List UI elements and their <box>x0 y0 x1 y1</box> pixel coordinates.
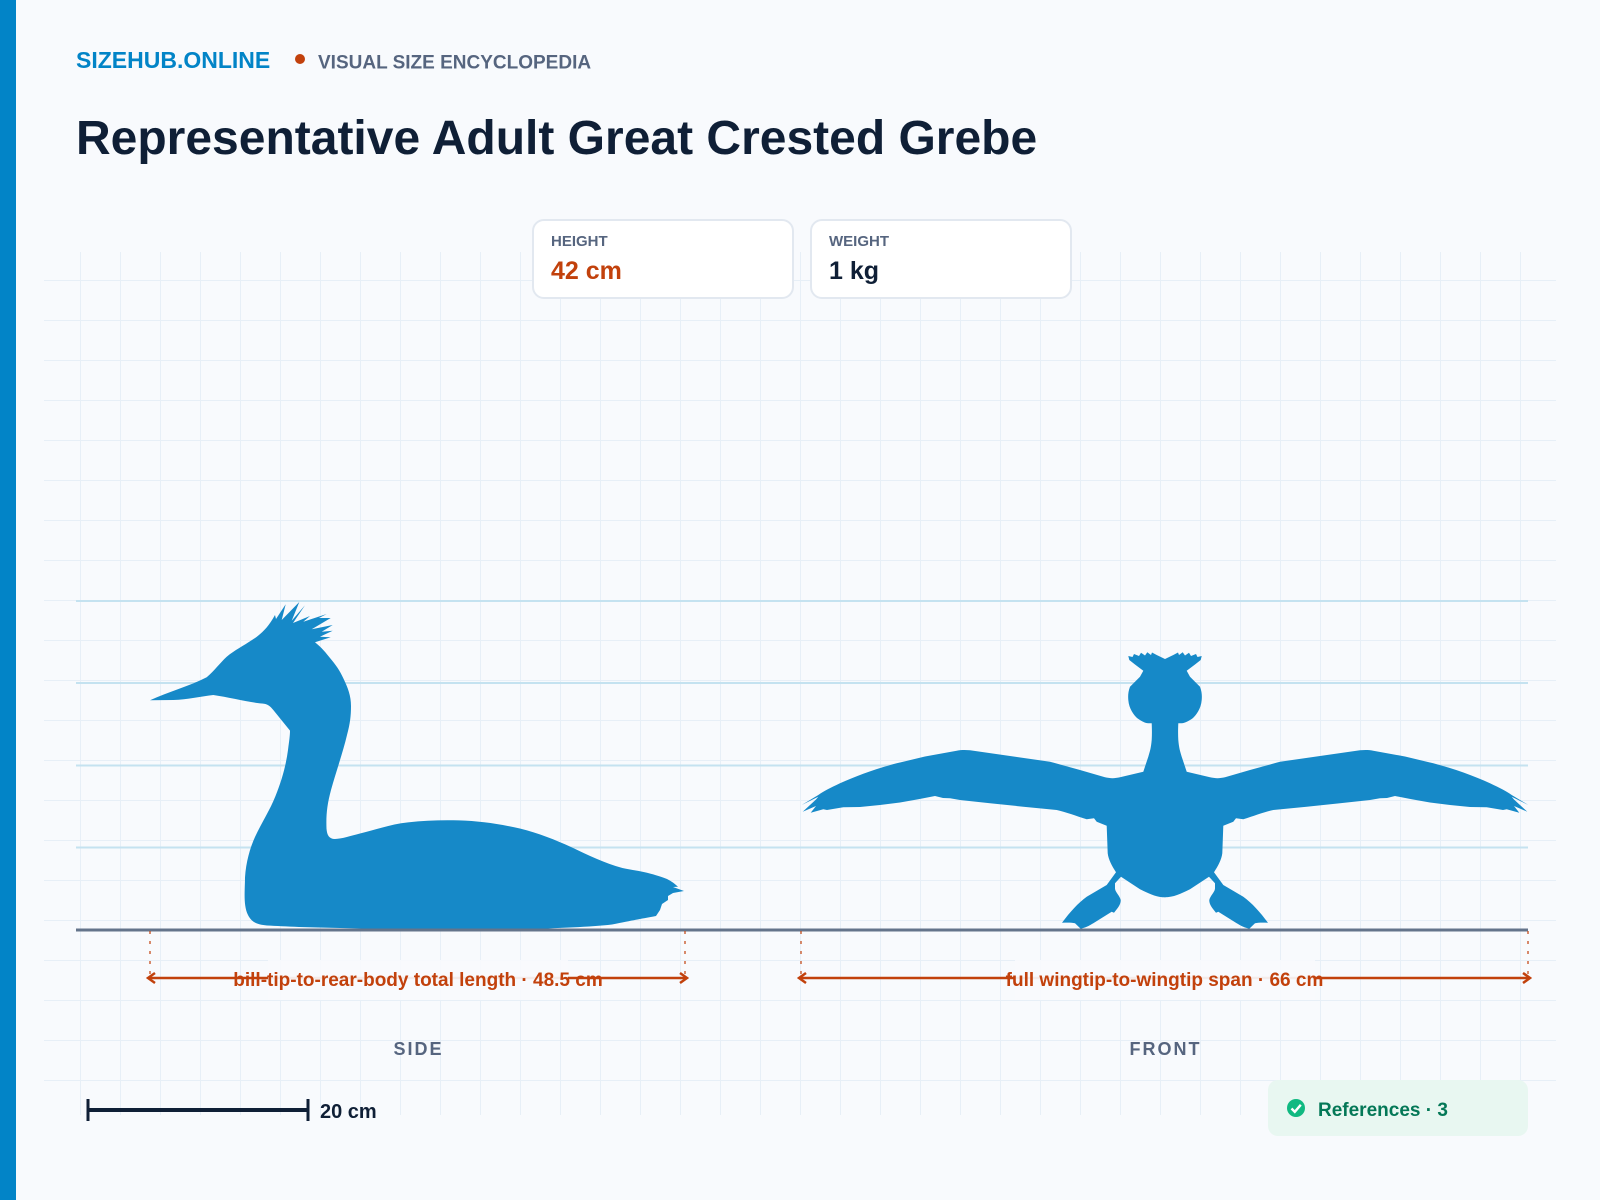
front view silhouette <box>802 652 1528 929</box>
height reference lines <box>76 601 1528 848</box>
side length dimension <box>148 931 687 1000</box>
front wingspan dimension: full wingtip-to-wingtip span · 66 cm <box>1006 970 1323 991</box>
stat card: weight: WEIGHT <box>829 233 889 250</box>
front view right half <box>1164 652 1528 929</box>
stat card: height: HEIGHT <box>551 233 608 250</box>
measurement grid <box>44 252 1556 1115</box>
stat card: weight <box>811 220 1071 298</box>
side view label: SIDE <box>393 1039 444 1059</box>
brand header: SIZEHUB.ONLINE <box>76 47 270 73</box>
references badge <box>1268 1080 1528 1136</box>
title: Representative Adult Great Crested Grebe <box>76 112 1037 165</box>
left accent bar <box>0 0 16 1200</box>
side length dimension: bill-tip-to-rear-body total length · 48.5 cm <box>233 970 603 991</box>
icon: check circle <box>1287 1099 1305 1117</box>
brand header <box>76 47 591 74</box>
front view label: FRONT <box>1130 1039 1202 1059</box>
references badge: References · 3 <box>1318 1100 1448 1121</box>
front wingspan dimension <box>799 931 1530 1000</box>
scale bar: 20 cm <box>320 1101 377 1123</box>
brand header: VISUAL SIZE ENCYCLOPEDIA <box>318 52 591 74</box>
side view silhouette <box>150 602 684 930</box>
ground line <box>76 928 1528 932</box>
stat card: height: 42 cm <box>551 257 622 285</box>
stat card: weight: 1 kg <box>829 257 879 285</box>
stat card: height <box>533 220 793 298</box>
front view left half <box>802 652 1166 929</box>
